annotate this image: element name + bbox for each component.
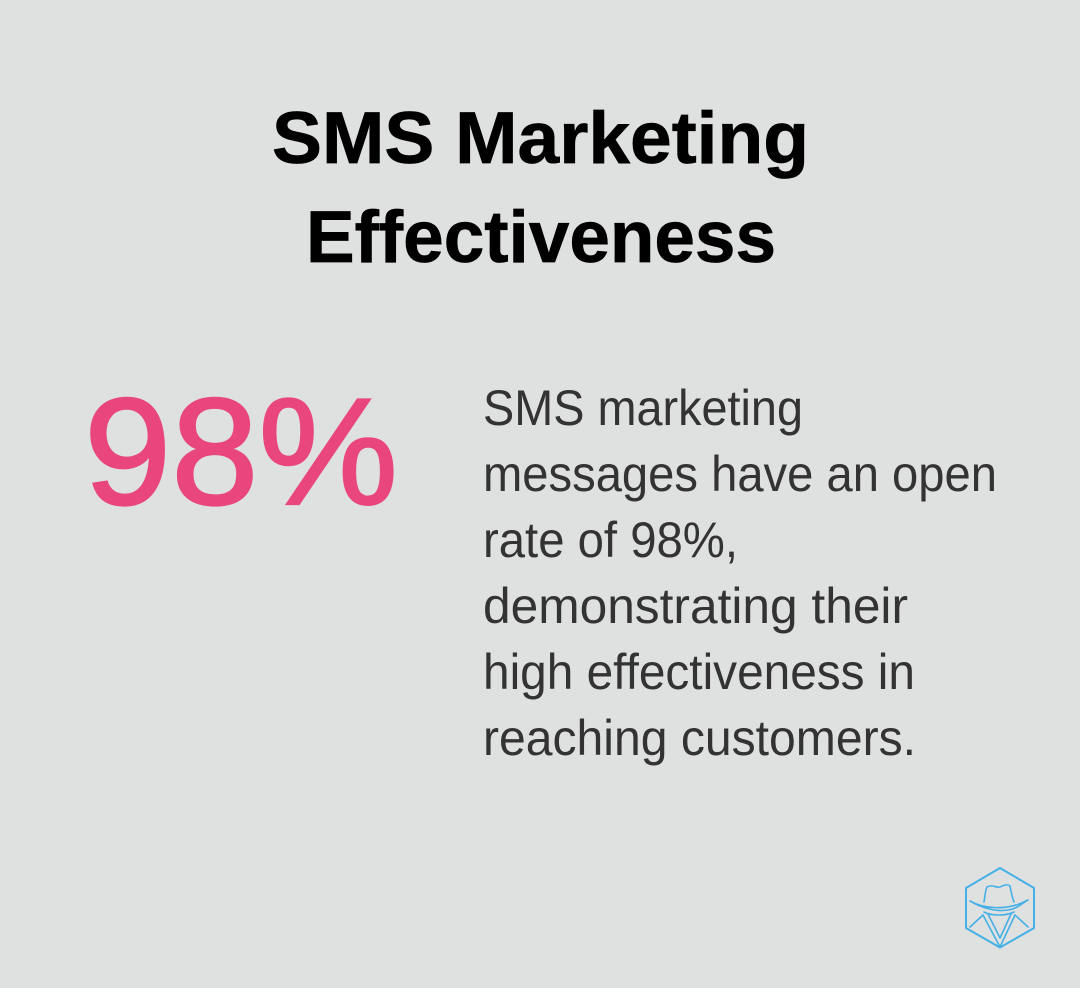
big statistic: 98%: 98%: [84, 367, 398, 537]
description text block: [483, 380, 997, 766]
description text block: messages have an open: [483, 446, 997, 502]
description text block: SMS marketing: [483, 380, 803, 436]
description text block: high effectiveness in: [483, 644, 915, 700]
title: SMS Marketing: [272, 98, 809, 179]
description text block: demonstrating their: [483, 578, 908, 634]
icon: hexagon logo with hat and coat: [966, 868, 1034, 948]
title: Effectiveness: [306, 197, 776, 278]
title: [272, 98, 809, 278]
description text block: rate of 98%,: [483, 512, 738, 568]
description text block: reaching customers.: [483, 710, 916, 766]
